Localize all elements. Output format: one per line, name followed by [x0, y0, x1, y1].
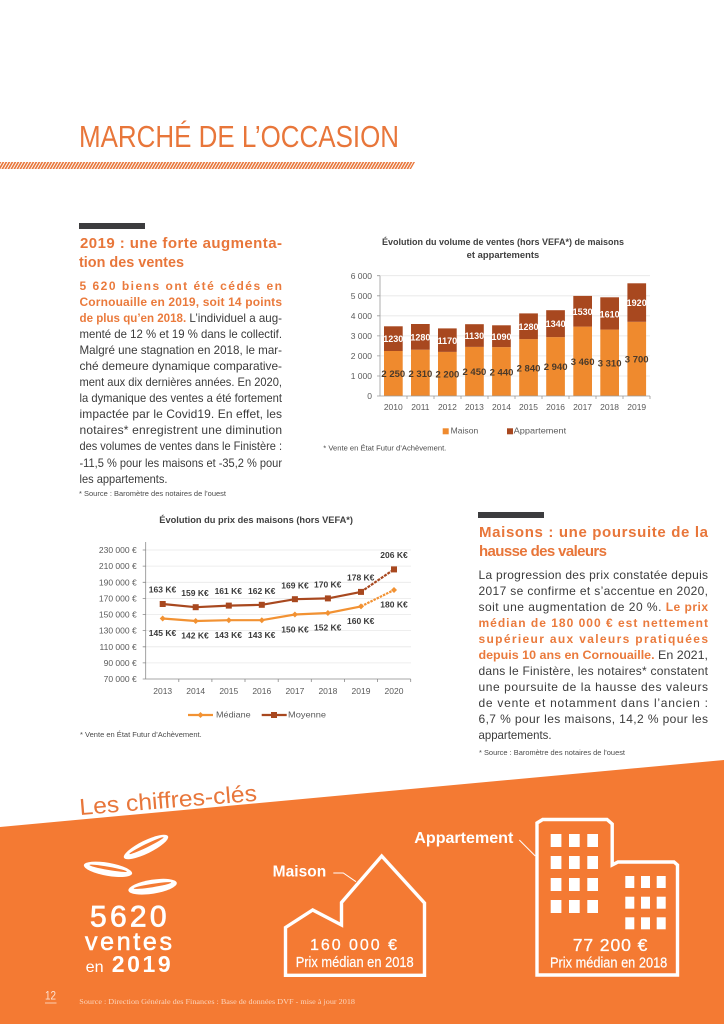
appartement values: 1340 [546, 319, 566, 329]
appartement values: 1280 [518, 322, 539, 332]
body text: impactée par le Covid19. En effet, les [80, 407, 282, 421]
chart footnote: * Vente en État Futur d’Achèvement. [80, 730, 202, 739]
body text: Malgré une stagnation en 2018, le mar- [80, 343, 282, 357]
body text: une poursuite de la hausse des valeurs [478, 680, 708, 694]
body text: supérieur aux valeurs pratiquées [478, 632, 708, 646]
body text: Cornouaille en 2019, soit 14 points [80, 295, 282, 309]
maison values: 2 450 [463, 367, 486, 378]
médiane line [160, 587, 397, 624]
y axis labels: 90 000 € [104, 658, 137, 668]
chart title: et appartements [467, 250, 539, 260]
moyenne values: 162 K€ [248, 586, 276, 596]
moyenne values: 169 K€ [281, 580, 309, 590]
bar chart: sales volume [323, 237, 650, 452]
title: MARCHÉ DE L’OCCASION [79, 119, 399, 154]
appartement values: 1170 [438, 336, 457, 346]
x axis labels: 2013 [153, 686, 172, 696]
maison values: 2 440 [490, 368, 513, 378]
body text: dans le Finistère, les notaires* constatent [478, 664, 709, 678]
body text [80, 279, 283, 486]
médiane values [149, 600, 408, 640]
section heading: hausse des valeurs [479, 543, 607, 560]
appartement values: 1920 [627, 298, 647, 308]
building windows [551, 834, 666, 929]
y axis labels: 110 000 € [100, 642, 137, 652]
leader line [333, 873, 356, 882]
section heading [79, 235, 282, 271]
panel: key figures background [0, 760, 724, 1024]
maison label: Maison [273, 864, 326, 881]
médiane values: 160 K€ [347, 616, 375, 626]
key figure: house [273, 856, 424, 975]
body text: médian de 180 000 € est nettement [478, 616, 708, 630]
moyenne values [149, 550, 408, 598]
y axis labels [99, 545, 137, 684]
legend [188, 710, 326, 720]
moyenne values: 178 K€ [347, 572, 375, 582]
médiane values: 150 K€ [281, 624, 309, 634]
maison values: 2 250 [381, 369, 405, 380]
body text: soit une augmentation de 20 %. Le prix [478, 600, 708, 614]
year value: 2019 [112, 951, 171, 977]
y axis labels: 2 000 [351, 351, 372, 361]
x axis labels: 2014 [186, 686, 205, 696]
x axis labels: 2018 [318, 686, 338, 696]
sales number: 5620 [90, 900, 166, 934]
y axis labels: 190 000 € [99, 577, 137, 587]
body text: les appartements. [80, 472, 168, 486]
source note: * Source : Baromètre des notaires de l’ouest [79, 489, 227, 498]
chart title [382, 237, 624, 260]
appartement values: 1280 [410, 332, 430, 342]
y axis labels: 6 000 [351, 271, 372, 281]
x axis labels [384, 402, 646, 412]
y axis labels: 130 000 € [99, 626, 137, 636]
y axis labels: 230 000 € [99, 545, 137, 555]
apartment caption: Prix médian en 2018 [550, 954, 667, 971]
section heading [479, 524, 709, 560]
line chart: house prices [80, 515, 411, 739]
x axis labels: 2017 [285, 686, 305, 696]
médiane values: 143 K€ [215, 630, 242, 640]
body text: 2017 se confirme et s’accentue en 2020, [478, 584, 708, 598]
appartement values: 1530 [573, 307, 593, 317]
icon: coins [83, 830, 178, 897]
body text: ché demeure dynamique comparative- [80, 359, 282, 373]
moyenne values: 206 K€ [380, 550, 408, 560]
médiane values: 142 K€ [181, 630, 209, 640]
body text: menté de 12 % et 19 % dans le collectif. [80, 327, 282, 341]
y axis labels: 1 000 [351, 371, 372, 381]
body text [478, 568, 709, 742]
legend: Maison [451, 426, 478, 436]
y axis labels: 150 000 € [99, 610, 137, 620]
x axis labels: 2019 [627, 402, 646, 412]
body text: 5 620 biens ont été cédés en [80, 279, 282, 293]
apartment price: 77 200 € [573, 935, 648, 955]
médiane values: 143 K€ [248, 630, 276, 640]
maison values [381, 354, 649, 380]
x axis labels: 2017 [573, 402, 592, 412]
x axis labels: 2020 [385, 686, 404, 696]
icon: house outline [286, 856, 424, 975]
gridlines [146, 550, 411, 663]
key figures heading: Les chiffres-clés [78, 780, 258, 820]
panel: sales text [79, 223, 283, 498]
body text: -11,5 % pour les maisons et -35,2 % pour [80, 456, 282, 470]
body text: de plus qu’en 2018. L’individuel a aug- [80, 311, 282, 325]
section heading: tion des ventes [79, 254, 184, 271]
chart title: Évolution du volume de ventes (hors VEFA*) de maisons [382, 237, 624, 247]
x axis labels: 2016 [252, 686, 272, 696]
chart footnote: * Vente en État Futur d’Achèvement. [323, 444, 446, 452]
sales year: en [86, 959, 104, 976]
section bar [478, 512, 544, 518]
appartement label: Appartement [414, 830, 514, 847]
y axis labels: 3 000 [351, 331, 372, 341]
médiane values: 145 K€ [149, 628, 176, 638]
appartement values: 1090 [491, 332, 512, 342]
legend: Médiane [216, 710, 251, 720]
moyenne values: 170 K€ [314, 579, 342, 589]
legend: Moyenne [288, 710, 326, 720]
icon: building outline [537, 820, 678, 975]
y axis labels: 5 000 [351, 291, 372, 301]
x axis labels: 2015 [519, 402, 538, 412]
x axis labels: 2016 [546, 402, 565, 412]
section heading: 2019 : une forte augmenta- [80, 235, 282, 252]
x axis labels: 2013 [465, 402, 484, 412]
moyenne values: 159 K€ [181, 588, 209, 598]
body text: notaires* enregistrent une diminution [80, 423, 282, 437]
body text: 6,7 % pour les maisons, 14,2 % pour les [478, 712, 708, 726]
y axis labels: 0 [367, 391, 372, 401]
body text: de vente et notamment dans l’ancien : [478, 696, 708, 710]
x axis labels: 2015 [219, 686, 239, 696]
maison values: 3 700 [625, 354, 649, 366]
page number: 12 [45, 990, 56, 1002]
legend: Appartement [514, 426, 567, 436]
body text: des volumes de ventes dans le Finistère : [80, 439, 282, 453]
y axis labels: 4 000 [351, 311, 372, 321]
key figure: sales [83, 830, 178, 977]
axes [143, 542, 411, 682]
gridlines [380, 276, 650, 376]
body text: La progression des prix constatée depuis [478, 568, 708, 582]
sales label: ventes [85, 928, 172, 956]
appartement values: 1130 [465, 331, 484, 341]
x axis labels: 2010 [384, 402, 403, 412]
body text: la dymanique des ventes a été fortement [80, 391, 283, 405]
house caption: Prix médian en 2018 [296, 954, 414, 971]
section bar [79, 223, 145, 229]
key figure: apartment [414, 820, 678, 975]
appartement values: 1610 [600, 310, 620, 320]
y axis labels: 170 000 € [99, 593, 137, 603]
leader line [519, 840, 535, 856]
legend [443, 426, 567, 436]
source footer: Source : Direction Générale des Finances : Base de données DVF - mise à jour 2018 [79, 997, 355, 1006]
maison bars [384, 322, 646, 396]
y axis labels: 210 000 € [99, 561, 137, 571]
y axis labels [351, 271, 372, 401]
x axis labels: 2014 [492, 402, 511, 412]
x axis labels: 2011 [411, 402, 430, 412]
maison values: 2 200 [436, 370, 459, 380]
x axis labels [153, 686, 404, 696]
médiane values: 152 K€ [314, 623, 342, 633]
x axis labels: 2018 [600, 402, 619, 412]
maison values: 2 310 [409, 369, 432, 380]
maison values: 2 840 [517, 364, 540, 374]
panel: house prices text [478, 512, 709, 757]
x axis labels: 2012 [438, 402, 457, 412]
title hatched rule [0, 162, 415, 169]
body text: depuis 10 ans en Cornouaille. En 2021, [478, 648, 708, 662]
axes [377, 276, 650, 399]
body text: appartements. [478, 728, 552, 742]
y axis labels: 70 000 € [104, 674, 137, 684]
maison values: 2 940 [544, 362, 567, 373]
appartement bars [384, 283, 646, 352]
maison values: 3 310 [598, 358, 621, 370]
appartement values: 1230 [383, 334, 403, 344]
moyenne values: 163 K€ [149, 585, 176, 595]
médiane values: 180 K€ [380, 600, 408, 610]
x axis labels: 2019 [352, 686, 371, 696]
body text: ment aux dix dernières années. En 2020, [80, 375, 282, 389]
appartement values [383, 298, 647, 346]
moyenne line [160, 566, 397, 610]
chart title: Évolution du prix des maisons (hors VEFA*) [159, 515, 353, 525]
section heading: Maisons : une poursuite de la [479, 524, 709, 541]
moyenne values: 161 K€ [215, 586, 242, 596]
maison values: 3 460 [571, 357, 594, 368]
source note: * Source : Baromètre des notaires de l’ouest [479, 748, 626, 757]
house price: 160 000 € [310, 937, 397, 954]
